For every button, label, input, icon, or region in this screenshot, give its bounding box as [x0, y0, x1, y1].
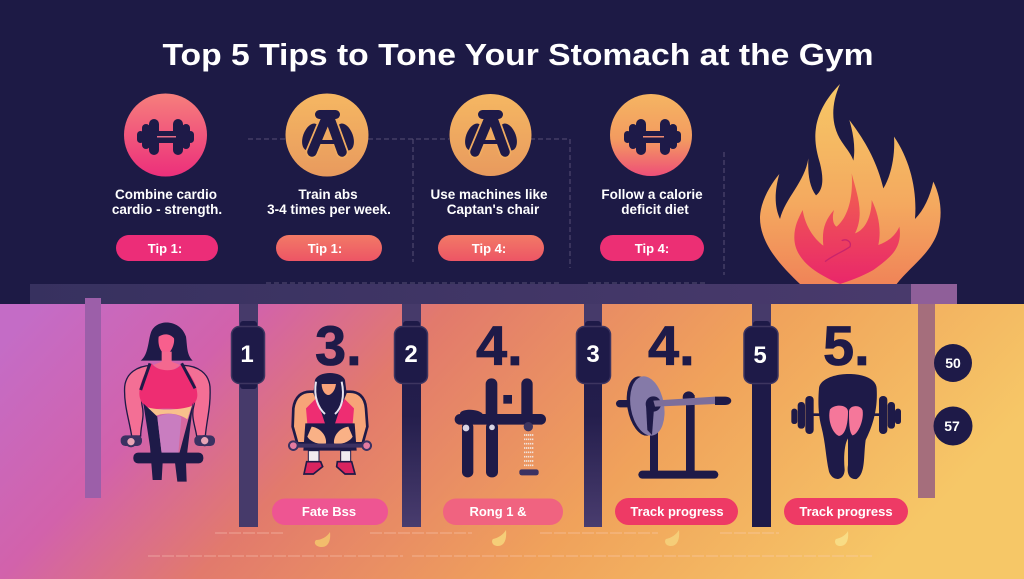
right pillar: [911, 284, 957, 498]
big number 5: 5.: [823, 314, 870, 377]
lower gradient background: [0, 304, 1024, 579]
figure: woman with dumbbells: [121, 322, 215, 482]
divider 4 with number badge: [744, 304, 778, 527]
figure: glutes with dumbbell: [791, 374, 901, 479]
tip card 1: [112, 94, 222, 261]
big number 4: 4.: [648, 314, 695, 377]
big number 4: 4.: [476, 314, 523, 377]
pill: Track progress: [615, 498, 738, 525]
tip card 2: [267, 94, 391, 261]
title: Top 5 Tips to Tone Your Stomach at the Gym: [162, 37, 874, 72]
icon: leaf 2: [492, 530, 506, 546]
figure: weight plate machine: [616, 374, 731, 479]
tip 2 caption: 3-4 times per week.: [267, 202, 391, 217]
pill: Fate Bss: Fate Bss: [302, 504, 356, 519]
divider 2 with number badge: 2: [404, 341, 418, 368]
tip 2 pill: [276, 235, 382, 261]
tip 2 caption: Train abs: [298, 187, 358, 202]
pill: Rong 1 &: [443, 498, 563, 525]
pill: Rong 1 &: Rong 1 &: [469, 504, 527, 519]
icon: bench machine: [286, 94, 368, 176]
icon: bench machine: [450, 94, 532, 176]
tip 4 pill: Tip 4:: [635, 241, 669, 256]
icon: leaf 1: [315, 532, 330, 547]
icon: dumbbell: [610, 94, 692, 176]
tip 1 pill: Tip 1:: [148, 241, 182, 256]
tip card 3: [430, 94, 548, 261]
pill: Fate Bss: [272, 498, 388, 525]
divider 4 with number badge: 5: [753, 342, 767, 369]
tip 2 pill: Tip 1:: [308, 241, 342, 256]
pill: Track progress: [784, 498, 908, 525]
tip 3 caption: Captan's chair: [447, 202, 540, 217]
divider 1 with number badge: [232, 304, 264, 527]
tip 4 caption: deficit diet: [621, 202, 689, 217]
icon: leaf 4: [835, 531, 848, 546]
top beam: [30, 284, 911, 304]
left pillar: [85, 298, 101, 498]
tip 4 pill: [600, 235, 704, 261]
icon: dumbbell: [124, 94, 207, 176]
figure: captain's chair machine: [455, 378, 546, 477]
badge 57: 57: [944, 418, 960, 434]
badge 50: [934, 344, 972, 382]
divider 2 with number badge: [394, 304, 428, 527]
badge 50: 50: [945, 355, 961, 371]
tip 4 caption: Follow a calorie: [601, 187, 703, 202]
icon: leaf 3: [665, 530, 679, 546]
pill: Track progress: Track progress: [630, 504, 724, 519]
tip card 4: [600, 94, 704, 261]
divider 3 with number badge: 3: [586, 341, 600, 368]
big number 3: 3.: [315, 314, 362, 377]
tip 1 caption: cardio - strength.: [112, 202, 222, 217]
tip 3 caption: Use machines like: [430, 187, 548, 202]
tip 1 pill: [116, 235, 218, 261]
icon: flame: [760, 84, 941, 284]
tip 1 caption: Combine cardio: [115, 187, 217, 202]
divider 3 with number badge: [576, 304, 610, 527]
tip 3 pill: [438, 235, 544, 261]
figure: squatting athlete: [289, 373, 371, 474]
divider 1 with number badge: 1: [240, 341, 254, 368]
badge 57: [934, 406, 972, 446]
tip 3 pill: Tip 4:: [472, 241, 506, 256]
pill: Track progress: Track progress: [799, 504, 893, 519]
